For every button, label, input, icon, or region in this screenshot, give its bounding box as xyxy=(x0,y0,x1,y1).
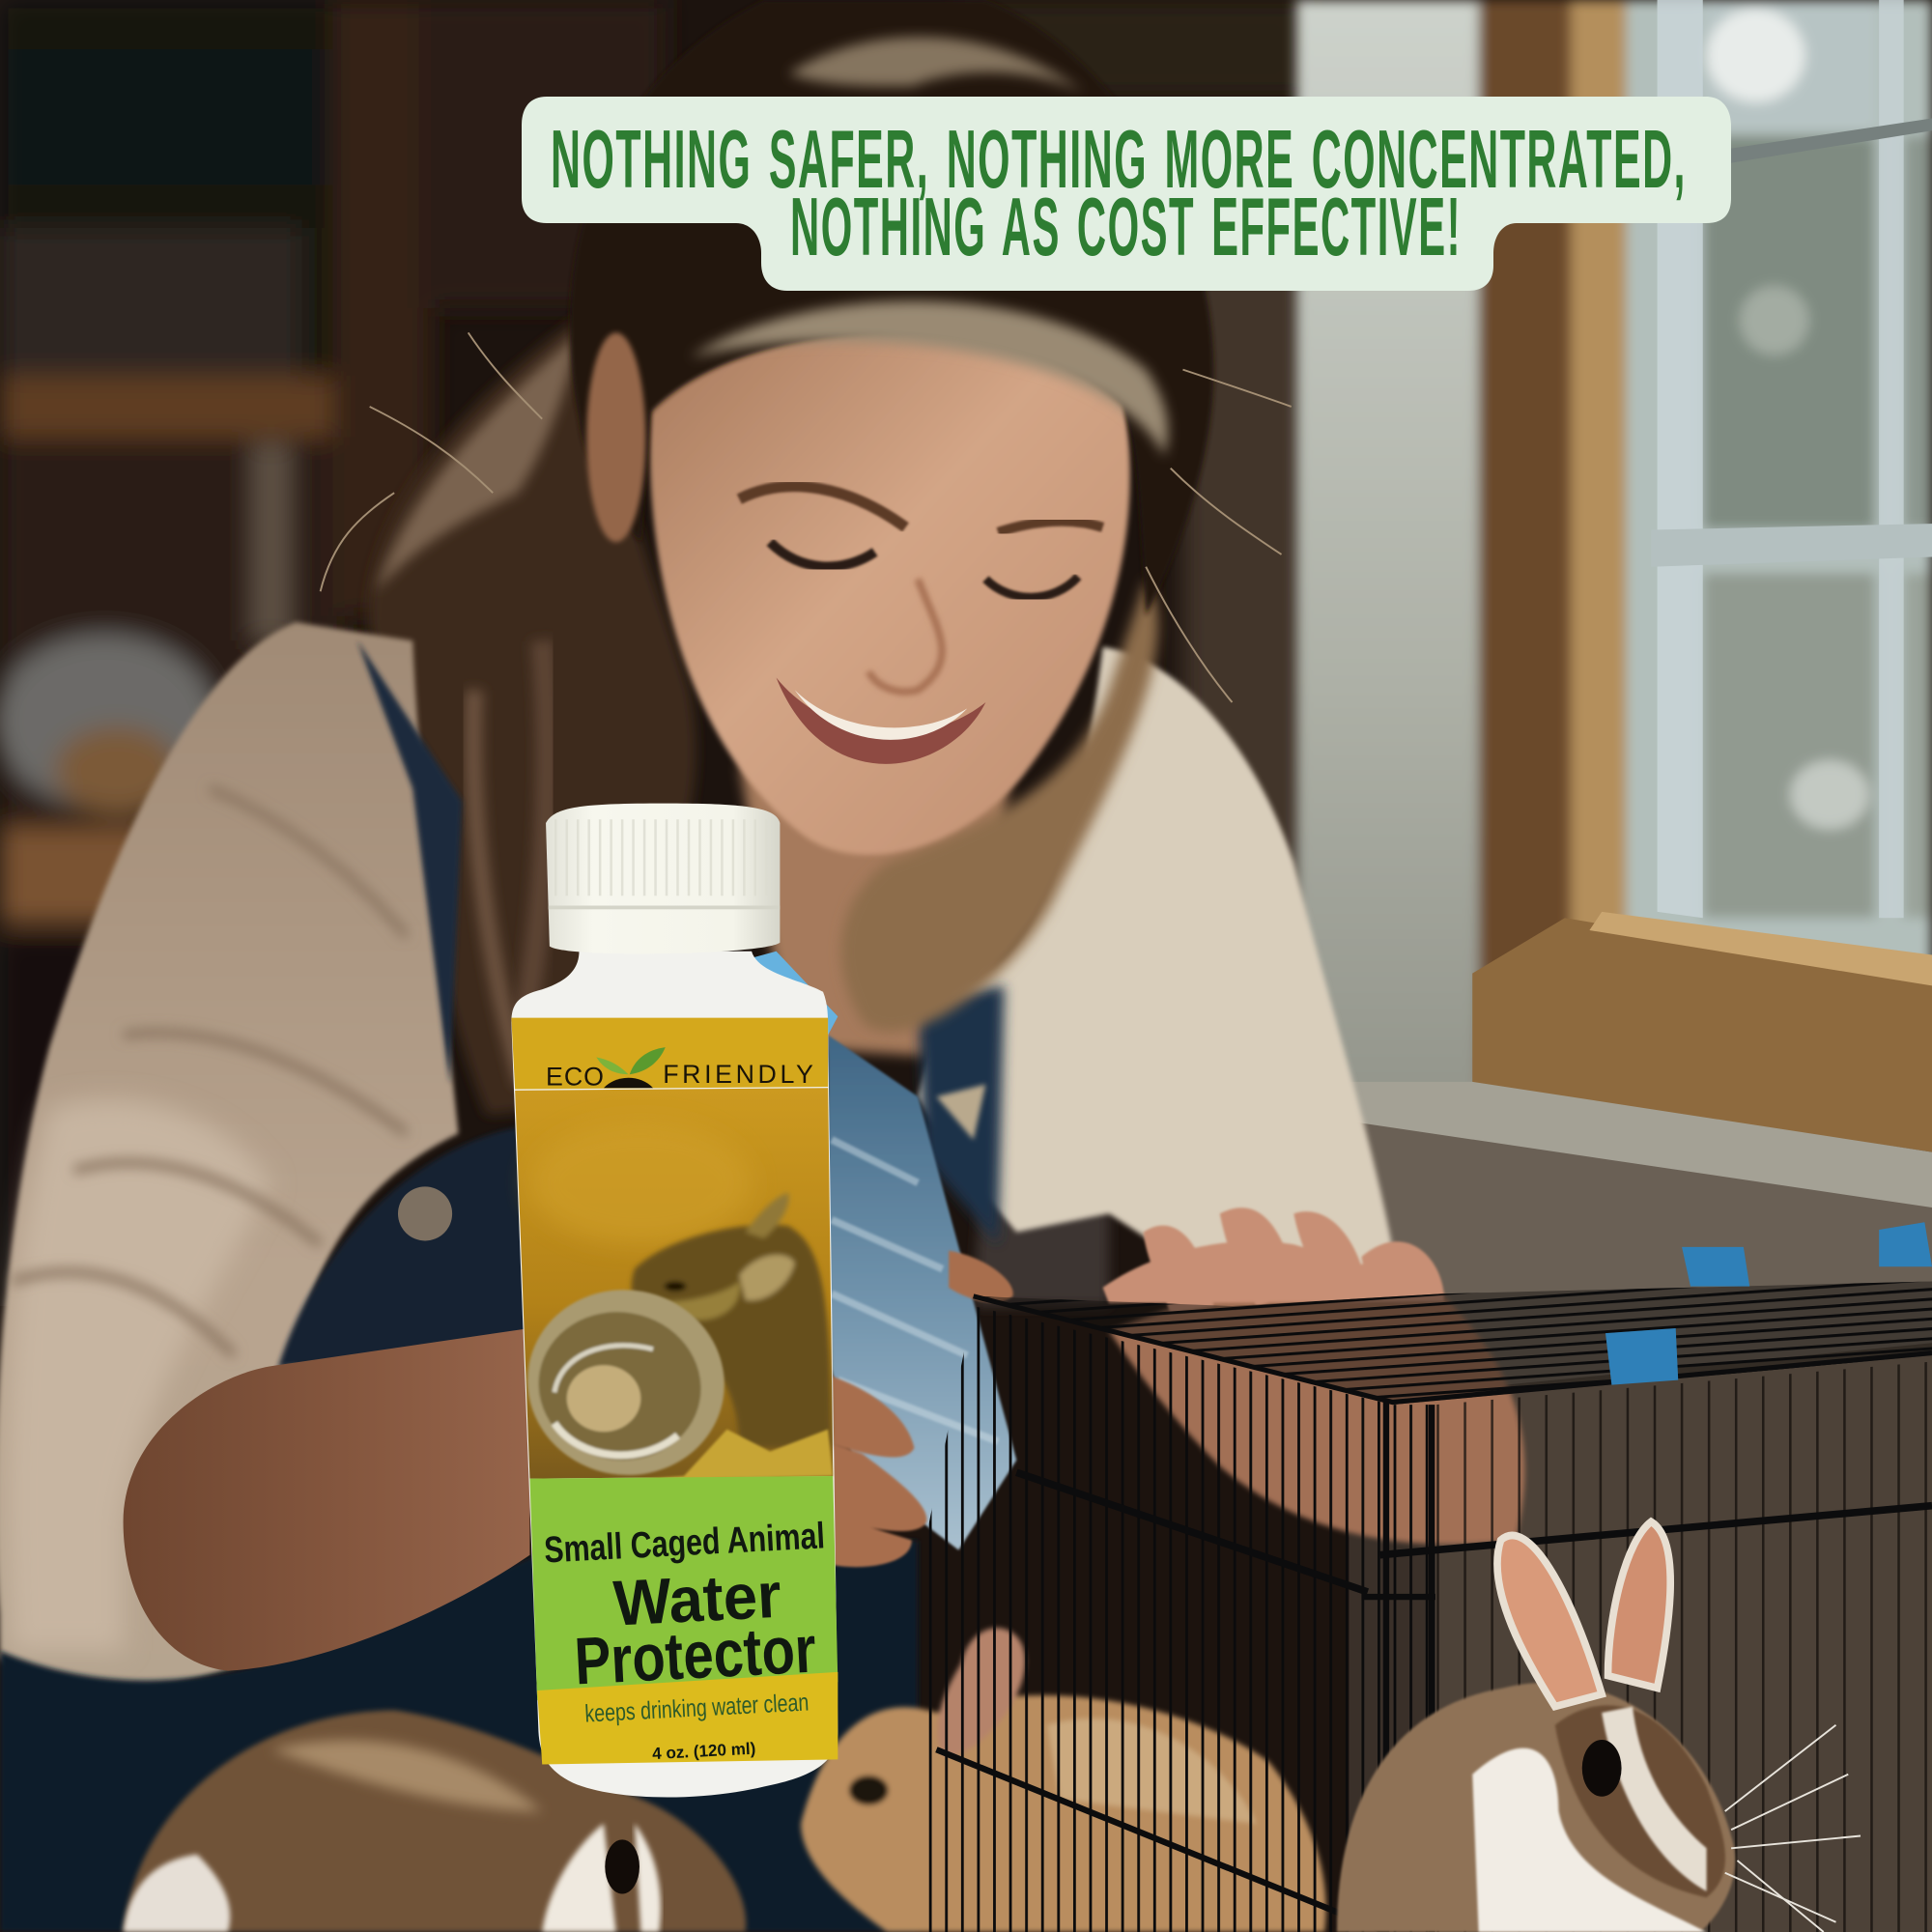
cage front wires xyxy=(918,1306,1435,1932)
rabbit: bottom left xyxy=(124,1710,746,1932)
label: artwork xyxy=(513,1088,833,1491)
water bottle held by woman xyxy=(750,952,1016,1550)
label: yellow bottom band xyxy=(537,1672,838,1765)
rabbit: right with white blaze xyxy=(1337,1521,1861,1932)
cage top grid xyxy=(974,1282,1932,1405)
label: eco friendly: FRIENDLY xyxy=(663,1060,813,1089)
sweater: left side and sleeve xyxy=(0,622,458,1692)
neck and chest xyxy=(739,764,1010,1060)
shadow under chest xyxy=(974,1109,1109,1306)
product bottle xyxy=(511,804,838,1798)
overall strap and top centre xyxy=(918,985,1005,1244)
bottle cap xyxy=(546,804,780,953)
banner xyxy=(522,97,1731,291)
hair: highlights xyxy=(690,301,1168,456)
label: eco friendly: ECO xyxy=(546,1063,604,1092)
hair: flyaway strands xyxy=(321,332,1292,702)
sweater: right side xyxy=(918,647,1399,1293)
hair: right blond locks xyxy=(841,579,1158,1032)
label: product name: Water xyxy=(611,1560,782,1640)
hair back and left side xyxy=(369,308,696,1115)
label: yellow top band xyxy=(511,1018,828,1090)
forearm xyxy=(124,1328,529,1671)
woman xyxy=(0,0,1524,1932)
face xyxy=(650,329,1130,855)
fingers on cage xyxy=(1103,1208,1444,1314)
bottle body xyxy=(511,952,838,1798)
label straw xyxy=(616,1430,833,1481)
hand holding bottle xyxy=(826,1251,1013,1567)
sweater: lit area xyxy=(8,1099,271,1651)
banner shape xyxy=(522,97,1731,291)
label: product name: Small Caged Animal xyxy=(543,1515,826,1571)
overalls xyxy=(0,640,918,1932)
ear xyxy=(586,332,645,542)
far forearm behind cage xyxy=(1109,1282,1524,1545)
icon: sprout xyxy=(596,1047,666,1088)
banner headline xyxy=(551,114,1687,273)
label bowl xyxy=(513,1274,739,1491)
label: product name: 4 oz. (120 ml) xyxy=(652,1739,756,1763)
hair: top xyxy=(570,0,1213,616)
label rabbit xyxy=(632,1193,831,1448)
window and wall xyxy=(1296,0,1932,1932)
hair: crown highlights xyxy=(788,37,1084,93)
sleeve folds xyxy=(13,788,407,1355)
cage back wires xyxy=(1435,1361,1932,1932)
rabbit: middle tan xyxy=(801,1628,1326,1932)
label: product name xyxy=(543,1515,837,1768)
label: green panel xyxy=(529,1476,838,1700)
label: product name: keeps drinking water clean xyxy=(584,1690,810,1728)
label: eco friendly xyxy=(546,1047,813,1092)
label: product name: Protector xyxy=(573,1612,818,1699)
cage xyxy=(918,1282,1932,1932)
blue cage clips xyxy=(1605,1222,1932,1385)
